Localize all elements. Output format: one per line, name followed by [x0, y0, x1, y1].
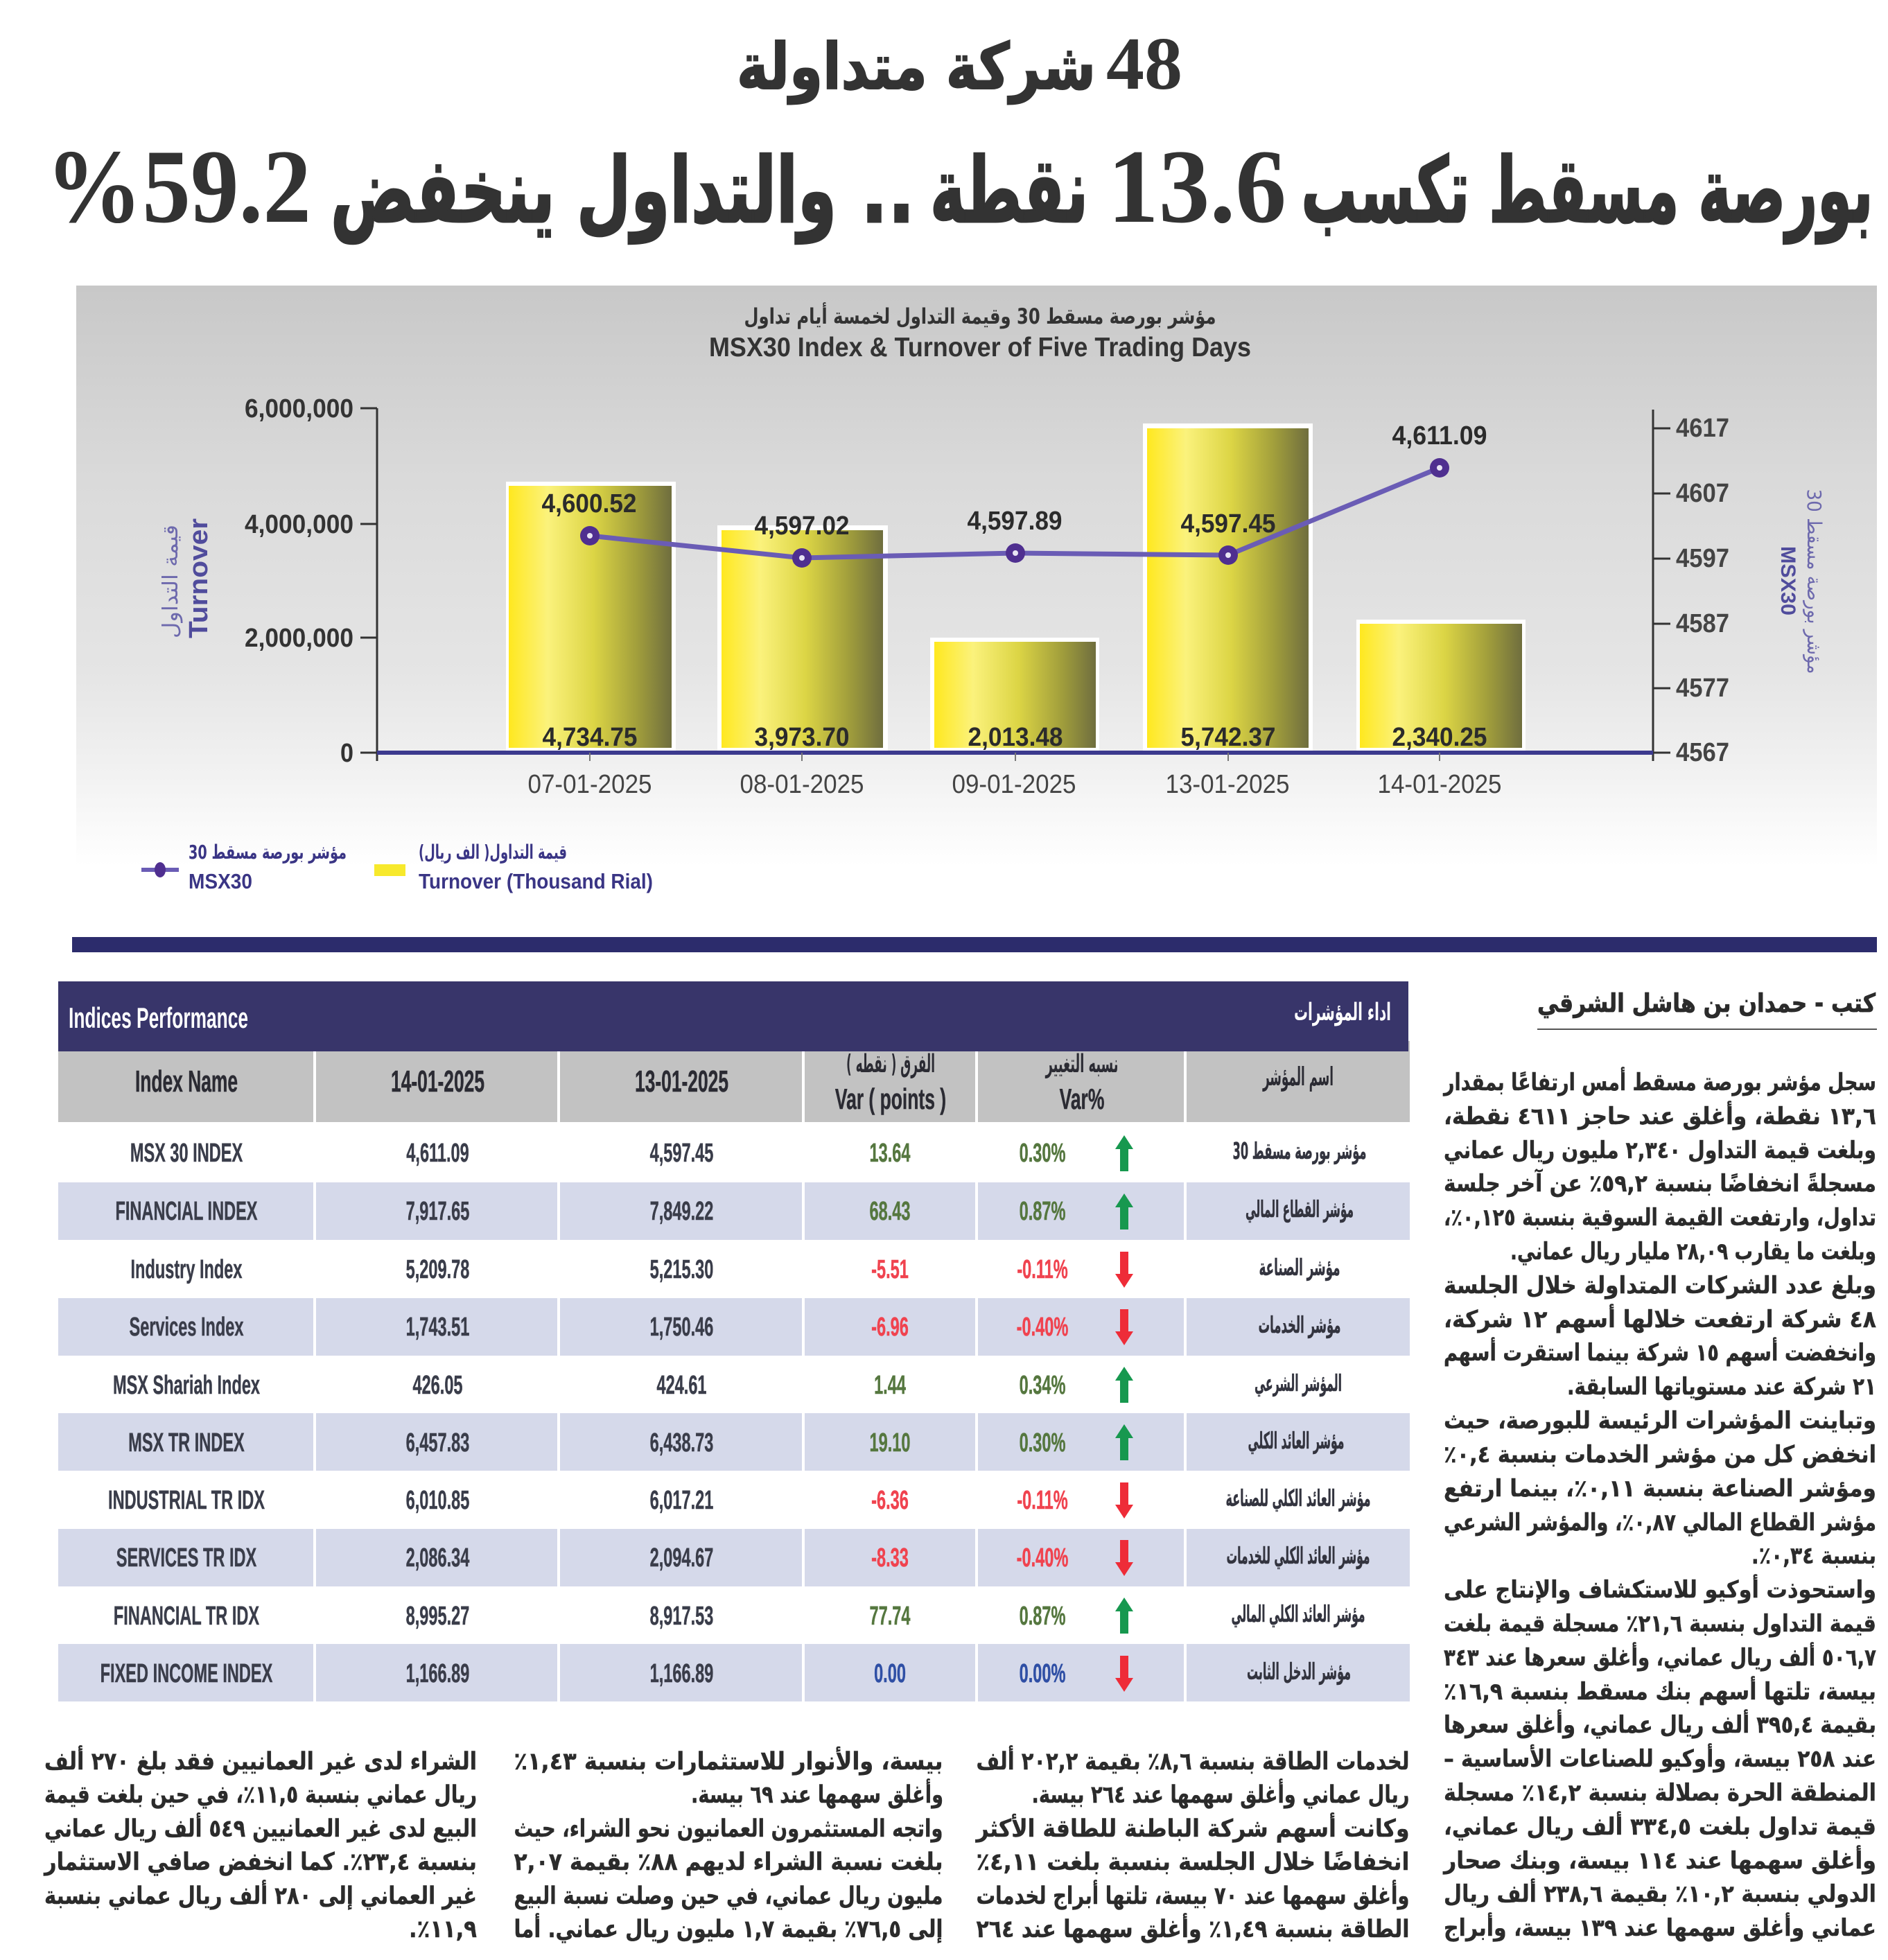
x axis ticks and dates: 13-01-2025	[1166, 770, 1289, 799]
chart title	[709, 302, 1251, 362]
table: indices performance	[58, 981, 1410, 1701]
text block: lower column 3: الشراء لدى غير العمانيين فقد بلغ ٢٧٠ ألف	[44, 1745, 477, 1776]
title: 48 listed companies: شركة متداولة	[737, 30, 1096, 105]
legend: turnover: قيمة التداول( الف ريال)	[419, 841, 567, 864]
row: FIXED INCOME INDEX: 0.00%	[1020, 1658, 1065, 1688]
index value labels	[542, 421, 1487, 541]
row: FINANCIAL INDEX: 68.43	[870, 1196, 910, 1225]
row: Services Index: 1,743.51	[406, 1311, 469, 1341]
legend: MSX30: MSX30	[189, 869, 252, 893]
row: MSX TR INDEX: MSX TR INDEX	[128, 1427, 245, 1457]
row: SERVICES TR IDX: 2,094.67	[650, 1542, 713, 1572]
text block: main article column: بنسبة ٠,٣٤٪.	[1751, 1542, 1876, 1570]
table column header: Var ( points )	[835, 1083, 946, 1116]
row: MSX 30 INDEX: 0.30%	[1020, 1137, 1065, 1167]
right axis: 4567	[1676, 738, 1729, 767]
text block: lower column 2: إلى ٧٦,٥٪ بقيمة ١,٧ مليون ريال عماني. أما	[514, 1913, 943, 1943]
text block: main article column: ٤٨ شركة ارتفعت خلالها أسهم ١٢ شركة،	[1444, 1304, 1876, 1333]
x axis ticks and dates: 14-01-2025	[1378, 770, 1501, 799]
bar: 13-01-2025	[1143, 423, 1313, 753]
text block: lower column 2: واتجه المستثمرون العمانيون نحو الشراء، حيث	[514, 1815, 943, 1843]
index value labels: 4,611.09	[1392, 421, 1487, 450]
text block: lower column 1: لخدمات الطاقة بنسبة ٨,٦٪ بقيمة ٢٠٢,٢ ألف	[976, 1745, 1410, 1776]
row: MSX 30 INDEX: MSX 30 INDEX	[130, 1137, 243, 1167]
table: indices performance: مؤشر الخدمات	[1259, 1311, 1340, 1339]
row: SERVICES TR IDX	[116, 1540, 1370, 1576]
text block: lower column 2: بلغت نسبة الشراء لديهم ٨٨٪ بقيمة ٢,٠٧	[514, 1848, 943, 1876]
row: Services Index: -6.96	[871, 1311, 909, 1341]
row: FINANCIAL TR IDX	[114, 1598, 1365, 1634]
row: MSX Shariah Index: 1.44	[874, 1370, 906, 1399]
text block: lower column 3	[43, 1745, 477, 1943]
row: MSX Shariah Index: MSX Shariah Index	[113, 1370, 260, 1399]
table: indices performance: مؤشر العائد الكلي للخدمات	[1227, 1542, 1370, 1570]
row: FIXED INCOME INDEX: FIXED INCOME INDEX	[100, 1658, 272, 1688]
row: FIXED INCOME INDEX: 1,166.89	[406, 1658, 469, 1688]
row: MSX Shariah Index: 426.05	[412, 1370, 463, 1399]
index value labels: 4,600.52	[542, 489, 636, 518]
table: indices performance: مؤشر العائد الكلي للصناعة	[1225, 1485, 1371, 1512]
right axis: 4617	[1676, 414, 1729, 443]
chart title: MSX30 Index & Turnover of Five Trading Days	[709, 333, 1251, 362]
table: indices performance: مؤشر القطاع المالي	[1245, 1196, 1354, 1223]
table: indices performance: مؤشر الدخل الثابت	[1247, 1658, 1351, 1686]
table title bar: اداء المؤشرات	[1294, 999, 1391, 1026]
main headline: نقطة	[930, 138, 1088, 243]
table: indices performance: مؤشر العائد الكلي	[1248, 1427, 1345, 1455]
x axis ticks and dates: 09-01-2025	[952, 770, 1076, 799]
legend: MSX30: مؤشر بورصة مسقط 30	[189, 841, 347, 864]
table column header: الفرق ( نقطه )	[846, 1050, 935, 1078]
row: MSX TR INDEX: 19.10	[870, 1427, 910, 1457]
row: INDUSTRIAL TR IDX	[108, 1482, 1371, 1519]
right axis title	[1776, 489, 1826, 674]
main headline: ..	[861, 138, 915, 243]
legend: turnover: Turnover (Thousand Rial)	[419, 869, 653, 893]
text block: main article column: ومؤشر الصناعة بنسبة ٠,١١٪، بينما ارتفع	[1444, 1475, 1876, 1503]
row: Services Index: -0.40%	[1017, 1311, 1068, 1341]
legend: turnover	[374, 841, 653, 893]
right axis	[1653, 410, 1729, 767]
text block: lower column 2: بيسة، والأنوار للاستثمارات بنسبة ١,٤٣٪	[514, 1746, 943, 1776]
legend: MSX30	[141, 841, 347, 893]
row: FINANCIAL TR IDX: 8,995.27	[406, 1600, 469, 1630]
divider band	[72, 937, 1877, 952]
bar: 07-01-2025	[506, 482, 676, 753]
row: Industry Index	[131, 1252, 1340, 1288]
x axis baseline	[377, 751, 1653, 755]
x axis ticks and dates: 07-01-2025	[528, 770, 652, 799]
text block: main article column: الدولي بنسبة ١٠,٢٪ بقيمة ٢٣٨,٦ ألف ريال	[1444, 1878, 1876, 1908]
left axis title	[159, 518, 213, 638]
text block: lower column 2	[514, 1746, 943, 1943]
row: SERVICES TR IDX: -0.40%	[1017, 1542, 1068, 1572]
text block: lower column 1	[975, 1745, 1410, 1943]
text block: lower column 2: وأغلق سهمها عند ٦٩ بيسة.	[691, 1778, 943, 1809]
row: Industry Index: 5,215.30	[650, 1254, 713, 1284]
left axis: 4,000,000	[245, 510, 353, 539]
right axis title: مؤشر بورصة مسقط 30	[1803, 489, 1826, 674]
x axis ticks and dates: 08-01-2025	[740, 770, 864, 799]
table column header: اسم المؤشر	[1262, 1062, 1334, 1092]
row: FINANCIAL TR IDX: 0.87%	[1020, 1600, 1065, 1630]
row: Services Index	[130, 1309, 1341, 1345]
right axis: 4587	[1676, 609, 1729, 638]
text block: lower column 1: وأغلق سهمها عند ٧٠ بيسة، تلتها أبراج لخدمات	[976, 1880, 1410, 1910]
row: FINANCIAL INDEX	[115, 1193, 1354, 1230]
text block: lower column 3: ريال عماني بنسبة ١١,٥٪، في حين بلغت قيمة	[44, 1781, 477, 1809]
row: MSX 30 INDEX: مؤشر بورصة مسقط 30	[1232, 1137, 1367, 1165]
text block: lower column 1: ريال عماني وأغلق سهمها عند ٢٦٤ بيسة.	[1031, 1778, 1410, 1809]
row: FIXED INCOME INDEX	[100, 1656, 1351, 1692]
row: Industry Index: Industry Index	[131, 1254, 243, 1284]
row: MSX 30 INDEX: 13.64	[870, 1137, 911, 1167]
turnover value labels: 3,973.70	[754, 723, 850, 752]
row: FIXED INCOME INDEX: 1,166.89	[650, 1658, 713, 1688]
row: MSX TR INDEX: 0.30%	[1020, 1427, 1065, 1457]
chart title: مؤشر بورصة مسقط 30 وقيمة التداول لخمسة أيام تداول	[744, 302, 1216, 329]
row: Industry Index: 5,209.78	[406, 1254, 469, 1284]
left axis: 0	[340, 739, 353, 768]
text block: lower column 3: بنسبة ٢٣,٤٪. كما انخفض صافي الاستثمار	[43, 1848, 477, 1876]
text block: lower column 3: البيع لدى غير العمانيين ٥٤٩ ألف ريال عماني	[44, 1812, 477, 1843]
text block: main article column: عند ٢٥٨ بيسة، وأوكيو للصناعات الأساسية –	[1444, 1743, 1876, 1773]
right axis: 4607	[1676, 479, 1729, 508]
table column header: 14-01-2025	[391, 1064, 484, 1099]
right axis: 4577	[1676, 674, 1729, 703]
text block: main article column: ٥٠٦,٧ ألف ريال عماني، وأغلق سعرها عند ٣٤٣	[1444, 1642, 1876, 1672]
turnover value labels: 5,742.37	[1181, 723, 1275, 752]
left axis title: قيمة التداول	[159, 525, 183, 638]
main headline: 13.6	[1108, 128, 1286, 245]
row: FIXED INCOME INDEX: 0.00	[874, 1658, 906, 1688]
right axis title: MSX30	[1776, 546, 1799, 615]
title: 48 listed companies: 48	[1106, 23, 1182, 105]
text block: lower column 3: ١١,٩٪.	[409, 1916, 477, 1943]
right axis: 4597	[1676, 544, 1729, 573]
index value labels: 4,597.02	[754, 511, 850, 541]
row: MSX 30 INDEX	[130, 1135, 1367, 1171]
row: Industry Index: -5.51	[871, 1254, 909, 1284]
row: FINANCIAL INDEX: 0.87%	[1020, 1196, 1065, 1225]
row: MSX 30 INDEX: 4,597.45	[650, 1137, 713, 1167]
row: MSX Shariah Index: 424.61	[656, 1370, 707, 1399]
text block: main article column: وأغلق سهمها عند ١١٤ بيسة، وبنك صحار	[1442, 1845, 1876, 1875]
turnover value labels: 4,734.75	[542, 723, 638, 752]
text block: lower column 1: الطاقة بنسبة ١,٤٩٪ وأغلق سهمها عند ٢٦٤	[976, 1913, 1410, 1943]
text block: lower column 2: مليون ريال عماني، في حين وصلت نسبة البيع	[514, 1882, 943, 1910]
x axis ticks and dates	[528, 753, 1501, 799]
table column header: نسبه التغيير	[1045, 1050, 1119, 1078]
table title bar: Indices Performance	[69, 1001, 248, 1034]
index value labels: 4,597.45	[1181, 509, 1275, 539]
row: MSX TR INDEX: 6,438.73	[650, 1427, 713, 1457]
text block: main article column: قيمة تداول بلغت ٣٣٤,٥ ألف ريال عماني،	[1444, 1811, 1876, 1841]
row: SERVICES TR IDX: -8.33	[871, 1542, 909, 1572]
turnover value labels: 2,013.48	[968, 723, 1063, 752]
left axis: 6,000,000	[245, 394, 353, 423]
row: Industry Index: مؤشر الصناعة	[1259, 1254, 1340, 1281]
table column header	[58, 1050, 1410, 1122]
turnover value labels: 2,340.25	[1392, 723, 1487, 752]
index value labels: 4,597.89	[968, 507, 1062, 536]
main headline: والتداول ينخفض	[331, 138, 837, 244]
text block: main article column	[1442, 1067, 1876, 1942]
main headline	[46, 128, 1873, 245]
row: SERVICES TR IDX: 2,086.34	[406, 1542, 470, 1572]
row: FINANCIAL TR IDX: 77.74	[870, 1600, 911, 1630]
table: indices performance: المؤشر الشرعي	[1255, 1370, 1342, 1397]
table column header: Index Name	[135, 1064, 238, 1099]
row: MSX Shariah Index: 0.34%	[1020, 1370, 1065, 1399]
row: FINANCIAL TR IDX: FINANCIAL TR IDX	[114, 1600, 259, 1630]
text block: lower column 3: غير العماني إلى ٢٨٠ ألف ريال عماني بنسبة	[44, 1880, 477, 1910]
table column header: Var%	[1060, 1083, 1104, 1116]
table: indices performance: مؤشر العائد الكلي المالي	[1231, 1600, 1365, 1628]
bar: 09-01-2025	[930, 638, 1099, 753]
row: INDUSTRIAL TR IDX: 6,017.21	[650, 1485, 713, 1514]
row: MSX TR INDEX: 6,457.83	[406, 1427, 469, 1457]
text block: lower column 1: انخفاضًا خلال الجلسة بنسبة بلغت ٤,١١٪	[976, 1848, 1410, 1876]
row: INDUSTRIAL TR IDX: -0.11%	[1017, 1485, 1068, 1514]
text block: lower column 1: وكانت أسهم شركة الباطنة للطاقة الأكثر	[975, 1812, 1410, 1843]
turnover value labels	[542, 723, 1487, 752]
row: MSX Shariah Index	[113, 1367, 1342, 1403]
row: FINANCIAL INDEX: 7,849.22	[650, 1196, 713, 1225]
table column header: 13-01-2025	[635, 1064, 728, 1099]
panel: chart of MSX30 index and turnover	[76, 286, 1877, 930]
row: Industry Index: -0.11%	[1017, 1254, 1068, 1284]
bar: 14-01-2025	[1356, 620, 1526, 753]
row: INDUSTRIAL TR IDX: INDUSTRIAL TR IDX	[108, 1485, 265, 1514]
row: FINANCIAL INDEX: FINANCIAL INDEX	[115, 1196, 258, 1225]
left axis	[245, 394, 377, 768]
line: MSX30 index	[580, 458, 1449, 568]
alternating row shading	[58, 1182, 1410, 1701]
text block: main article column: بقيمة ٣٩٥,٤ ألف ريال عماني، وأغلق سعرها	[1444, 1709, 1876, 1739]
row: MSX TR INDEX	[128, 1424, 1345, 1460]
row: INDUSTRIAL TR IDX: 6,010.85	[406, 1485, 469, 1514]
row: Services Index: Services Index	[130, 1311, 244, 1341]
left axis title: Turnover	[184, 518, 213, 638]
row: FINANCIAL TR IDX: 8,917.53	[650, 1600, 713, 1630]
left axis: 2,000,000	[245, 624, 353, 653]
row: MSX 30 INDEX: 4,611.09	[406, 1137, 469, 1167]
row: INDUSTRIAL TR IDX: -6.36	[871, 1485, 909, 1514]
main headline: %59.2	[46, 128, 311, 245]
row: FINANCIAL INDEX: 7,917.65	[406, 1196, 469, 1225]
row: SERVICES TR IDX: SERVICES TR IDX	[116, 1542, 256, 1572]
table title bar	[58, 981, 1410, 1055]
bar: 08-01-2025	[717, 525, 888, 753]
text block: main article column: ١٣,٦ نقطة، وأغلق عند حاجز ٤٦١١ نقطة،	[1444, 1101, 1876, 1130]
row: Services Index: 1,750.46	[650, 1311, 713, 1341]
